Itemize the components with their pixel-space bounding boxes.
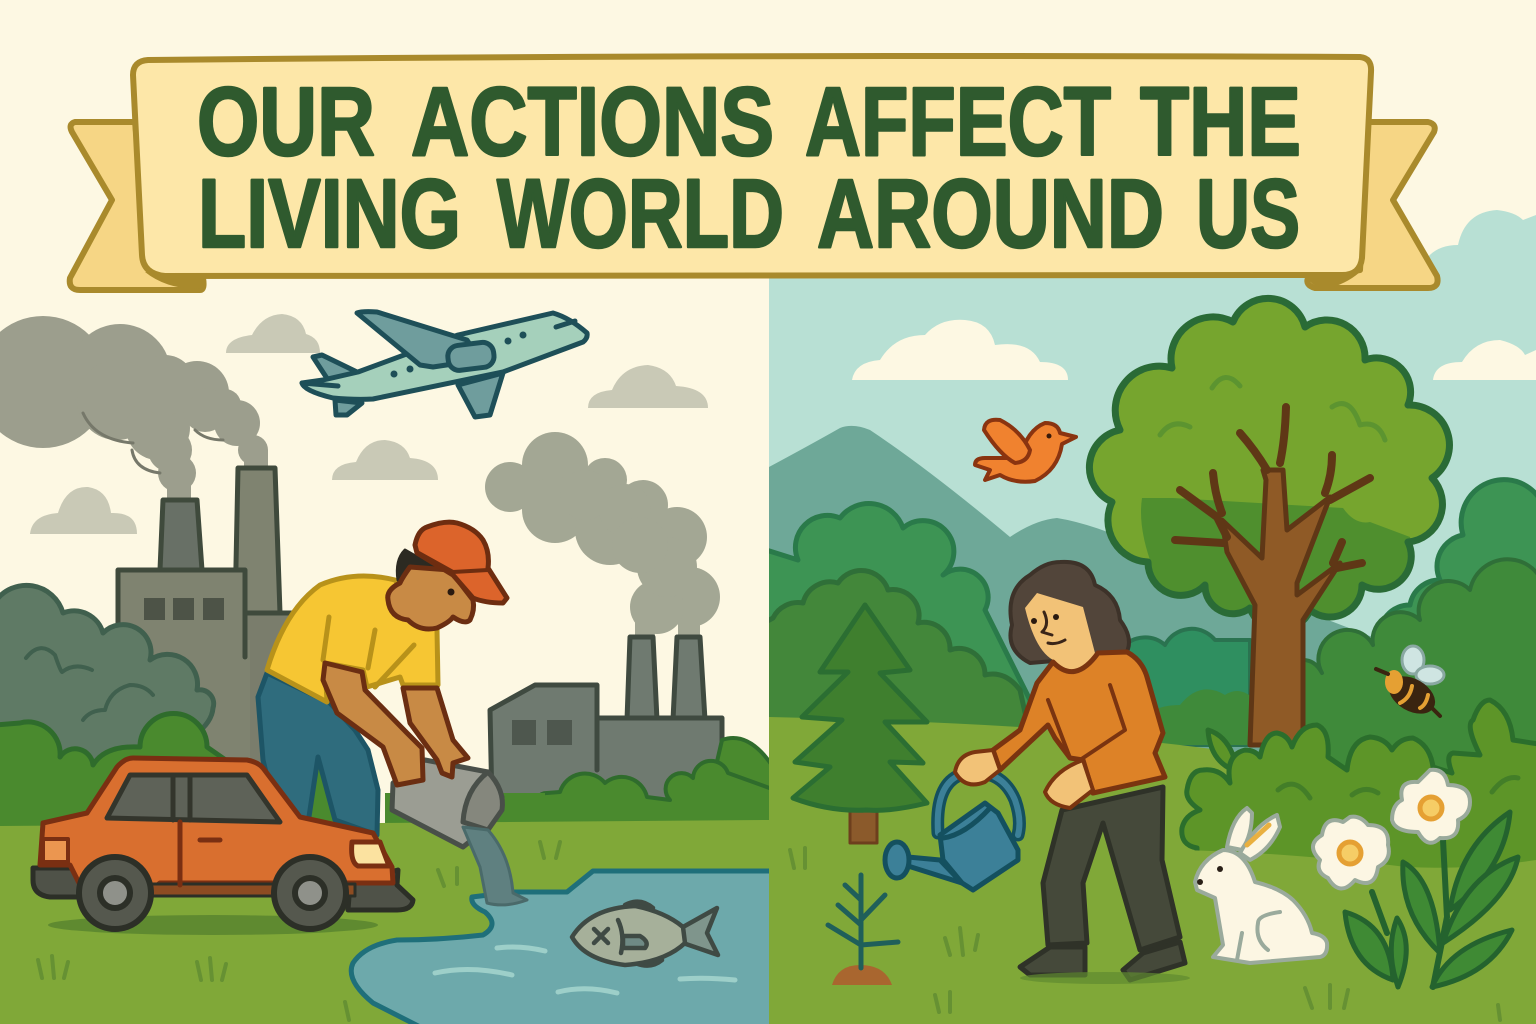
mid green bushes left xyxy=(760,570,1030,735)
crown shadow xyxy=(1130,498,1420,625)
red car xyxy=(33,758,413,935)
smoke cloud from far factory xyxy=(485,432,720,640)
mountains xyxy=(769,426,1385,760)
watering can xyxy=(885,773,1019,890)
tree crown xyxy=(1089,298,1449,630)
title line 1: THE xyxy=(1140,67,1301,176)
banner panel xyxy=(133,56,1371,276)
man's cap xyxy=(415,522,507,603)
bucket xyxy=(392,760,502,847)
pale clouds left xyxy=(30,314,708,534)
woman's face xyxy=(1025,593,1095,676)
dead fish xyxy=(572,902,718,966)
airplane xyxy=(302,312,587,417)
bee xyxy=(1376,646,1444,721)
man's shirt xyxy=(267,576,438,702)
panel: polluted world xyxy=(0,312,780,1024)
factory with chimneys xyxy=(118,468,295,790)
title xyxy=(197,67,1301,268)
title line 2 xyxy=(198,159,1300,268)
man's face xyxy=(388,567,474,629)
title line 2: AROUND xyxy=(817,159,1164,268)
grey-green bushes xyxy=(0,585,214,775)
title line 1: ACTIONS xyxy=(411,67,774,176)
water ripples xyxy=(435,947,735,993)
smoke cloud from tall chimneys xyxy=(0,316,268,503)
woman's sweater xyxy=(993,652,1165,793)
title line 2: US xyxy=(1196,159,1300,268)
woman's hair xyxy=(1010,562,1129,663)
back forest left xyxy=(769,501,1030,706)
title banner xyxy=(70,56,1438,290)
white flowers xyxy=(1313,770,1518,987)
title line 1: OUR xyxy=(197,67,375,176)
white clouds xyxy=(852,320,1536,380)
woman's shoes xyxy=(1020,947,1085,975)
tree trunk and branches xyxy=(1222,470,1340,745)
title line 1: AFFECT xyxy=(805,67,1111,176)
sapling xyxy=(828,875,898,985)
green bush band right xyxy=(385,736,769,823)
green bush band left xyxy=(0,711,226,826)
leafy tree xyxy=(1089,298,1449,745)
near lawn xyxy=(1180,850,1536,1024)
man's hair xyxy=(397,550,440,580)
ground left xyxy=(0,820,769,1024)
woman's shadow xyxy=(1020,972,1190,984)
man's front arm xyxy=(323,663,423,785)
woman's hands xyxy=(955,750,1000,784)
woman watering xyxy=(885,562,1185,980)
panel: thriving world xyxy=(760,210,1536,1024)
green behind legs xyxy=(312,769,334,822)
man's back arm xyxy=(403,688,468,777)
grass tufts left xyxy=(38,842,560,1020)
right ribbon tail xyxy=(1307,122,1438,288)
man pouring waste xyxy=(258,522,527,905)
pine tree xyxy=(793,605,927,843)
back forest right xyxy=(1384,477,1536,616)
title line 2: LIVING xyxy=(198,159,461,268)
polluted pond xyxy=(351,871,780,1024)
front bush xyxy=(1182,700,1536,890)
orange bird xyxy=(975,420,1076,482)
mid green bushes right xyxy=(1306,557,1536,769)
far factory xyxy=(490,637,722,805)
woman's trousers xyxy=(1043,787,1180,950)
man's jeans xyxy=(258,673,378,835)
ground right xyxy=(769,717,1235,1024)
sky xyxy=(769,210,1536,636)
title line 2: WORLD xyxy=(497,159,784,268)
grass tufts right xyxy=(790,848,1500,1020)
mid green bush near trunk xyxy=(1158,689,1250,745)
title line 1 xyxy=(197,67,1301,176)
dirty water stream xyxy=(463,827,527,905)
left ribbon tail xyxy=(70,122,204,290)
back forest behind woman xyxy=(1115,629,1250,745)
white rabbit xyxy=(1195,808,1327,963)
